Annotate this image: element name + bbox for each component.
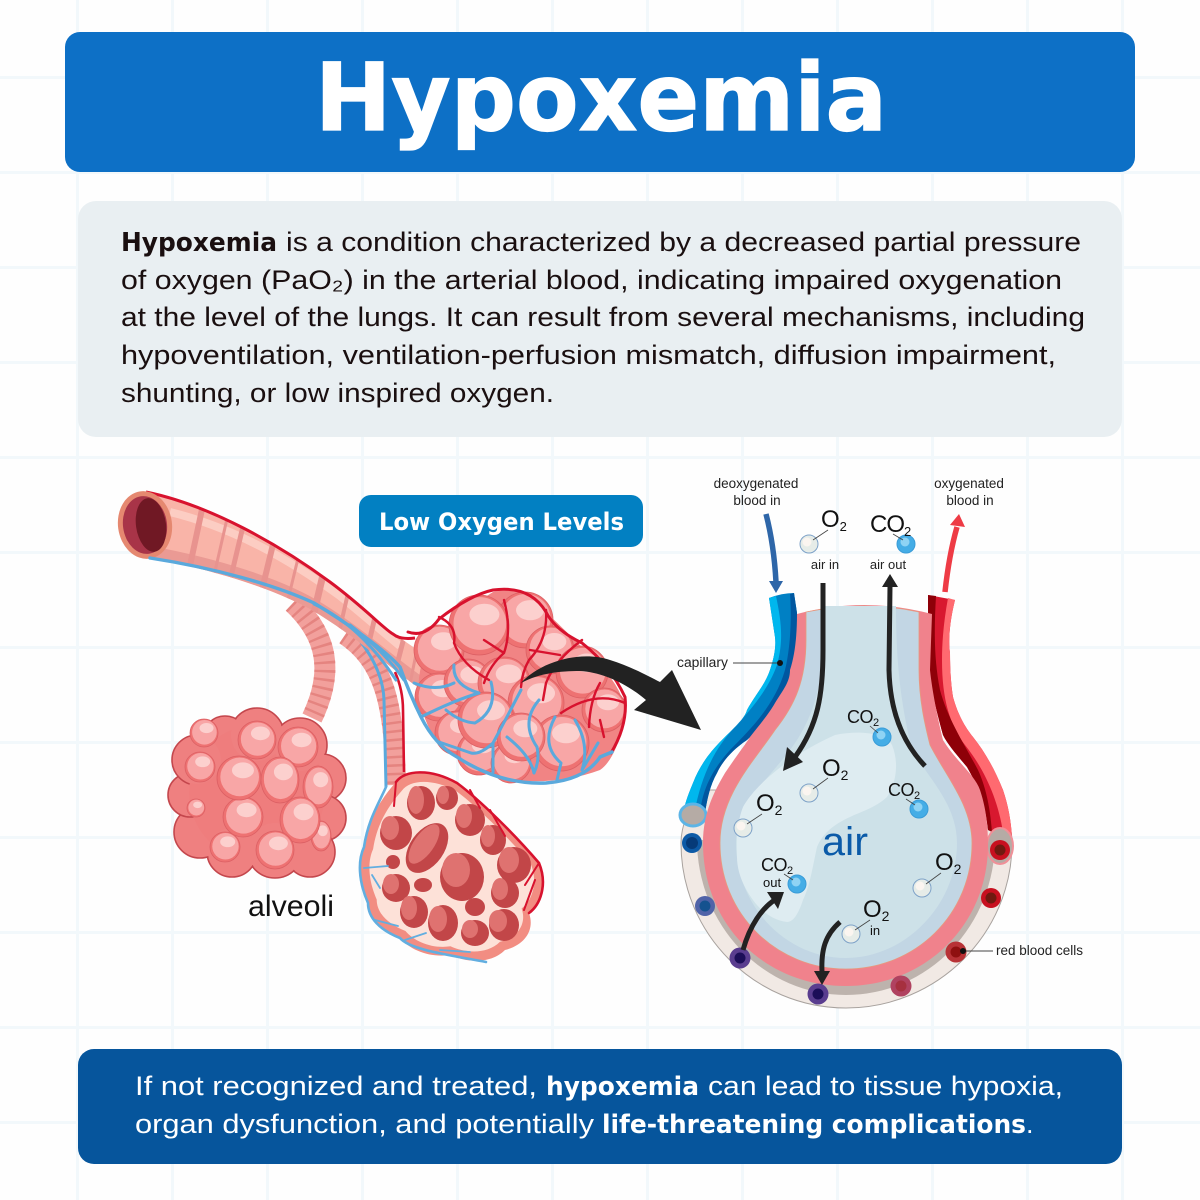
definition text: shunting, or low inspired oxygen. xyxy=(121,378,554,408)
molecule labels: 2 xyxy=(954,861,962,877)
inner air xyxy=(736,606,957,958)
red capillaries xyxy=(408,589,625,753)
capillary: oxygenated xyxy=(928,595,1013,864)
definition text: is a condition characterized by a decreased partial pressure xyxy=(286,227,1081,257)
molecules xyxy=(734,530,941,943)
diagram labels: air out xyxy=(870,557,906,572)
arrow: alveolus magnified xyxy=(521,656,701,730)
conclusion text: organ dysfunction, and potentially xyxy=(135,1109,595,1139)
leader lines xyxy=(733,660,993,954)
molecule labels: 2 xyxy=(914,790,920,802)
outer tissue xyxy=(681,790,1012,1008)
blue capillaries xyxy=(150,558,612,783)
molecule labels: 2 xyxy=(841,767,849,783)
molecule labels: in xyxy=(870,923,880,938)
molecule labels: CO xyxy=(847,707,873,727)
diagram labels: air in xyxy=(811,557,839,572)
molecule labels: 2 xyxy=(873,717,879,729)
title banner xyxy=(65,32,1135,172)
left alveoli cluster xyxy=(168,708,346,878)
conclusion text: If not recognized and treated, xyxy=(135,1071,537,1101)
definition text: at the level of the lungs. It can result from several mechanisms, including xyxy=(121,302,1085,332)
definition text: hypoventilation, ventilation-perfusion mismatch, diffusion impairment, xyxy=(121,340,1056,370)
illustration: alveoli xyxy=(114,488,626,962)
tissue shadow ring xyxy=(697,840,995,995)
conclusion text: . xyxy=(1026,1109,1034,1139)
molecule labels xyxy=(756,506,962,938)
bronchial stem to cross-section cluster xyxy=(330,610,404,787)
diagram labels: blood in xyxy=(946,493,994,508)
molecule labels: CO xyxy=(761,855,787,875)
panel: definition xyxy=(78,201,1122,437)
air space xyxy=(720,606,972,969)
molecule labels: 2 xyxy=(787,865,793,877)
callout: low oxygen levels: Low Oxygen Levels xyxy=(379,508,624,536)
molecule labels: CO xyxy=(888,780,914,800)
label: alveoli: alveoli xyxy=(248,890,334,923)
molecule labels: CO xyxy=(870,511,904,538)
definition text xyxy=(121,227,1085,408)
diagram labels: capillary xyxy=(677,655,728,670)
diagram: gas exchange in alveolus xyxy=(677,476,1083,1008)
molecule labels: out xyxy=(763,875,781,890)
molecule labels: O xyxy=(821,506,840,533)
diagram labels: oxygenated xyxy=(934,476,1004,491)
molecule labels: O xyxy=(935,849,954,876)
conclusion text: can lead to tissue hypoxia, xyxy=(708,1071,1063,1101)
diagram labels: red blood cells xyxy=(996,943,1083,958)
conclusion text: hypoxemia xyxy=(546,1072,699,1102)
arrows: air flow xyxy=(743,574,925,985)
cross-section alveoli cluster xyxy=(360,772,543,962)
molecule labels: 2 xyxy=(840,519,847,534)
bronchus opening xyxy=(114,488,176,562)
red blood cells xyxy=(682,833,1010,1004)
bronchus tube xyxy=(146,492,425,694)
alveolar wall xyxy=(703,605,988,986)
definition text: of oxygen (PaO₂) in the arterial blood, indicating impaired oxygenation xyxy=(121,265,1062,295)
molecule labels: O xyxy=(756,790,775,817)
definition text: Hypoxemia xyxy=(121,228,277,258)
bronchial stem to left cluster xyxy=(293,603,325,718)
capillary: deoxygenated xyxy=(680,593,797,826)
top alveoli cluster with capillaries xyxy=(150,558,626,783)
molecule labels: O xyxy=(822,755,841,782)
callout: low oxygen levels xyxy=(359,495,643,547)
cross-section capillaries xyxy=(360,772,543,962)
molecule labels: 2 xyxy=(882,908,890,924)
molecule labels: O xyxy=(863,896,882,923)
diagram labels: deoxygenated xyxy=(714,476,798,491)
label: air: air xyxy=(822,820,868,864)
conclusion text xyxy=(135,1071,1063,1140)
panel: conclusion xyxy=(78,1049,1122,1164)
air highlight xyxy=(737,733,896,922)
diagram labels: blood in xyxy=(733,493,781,508)
arrows: blood flow xyxy=(766,514,965,593)
title: Hypoxemia xyxy=(315,44,887,153)
conclusion text: life-threatening complications xyxy=(602,1110,1026,1140)
molecule labels: 2 xyxy=(904,524,911,539)
diagram labels xyxy=(677,476,1083,958)
molecule labels: 2 xyxy=(775,802,783,818)
